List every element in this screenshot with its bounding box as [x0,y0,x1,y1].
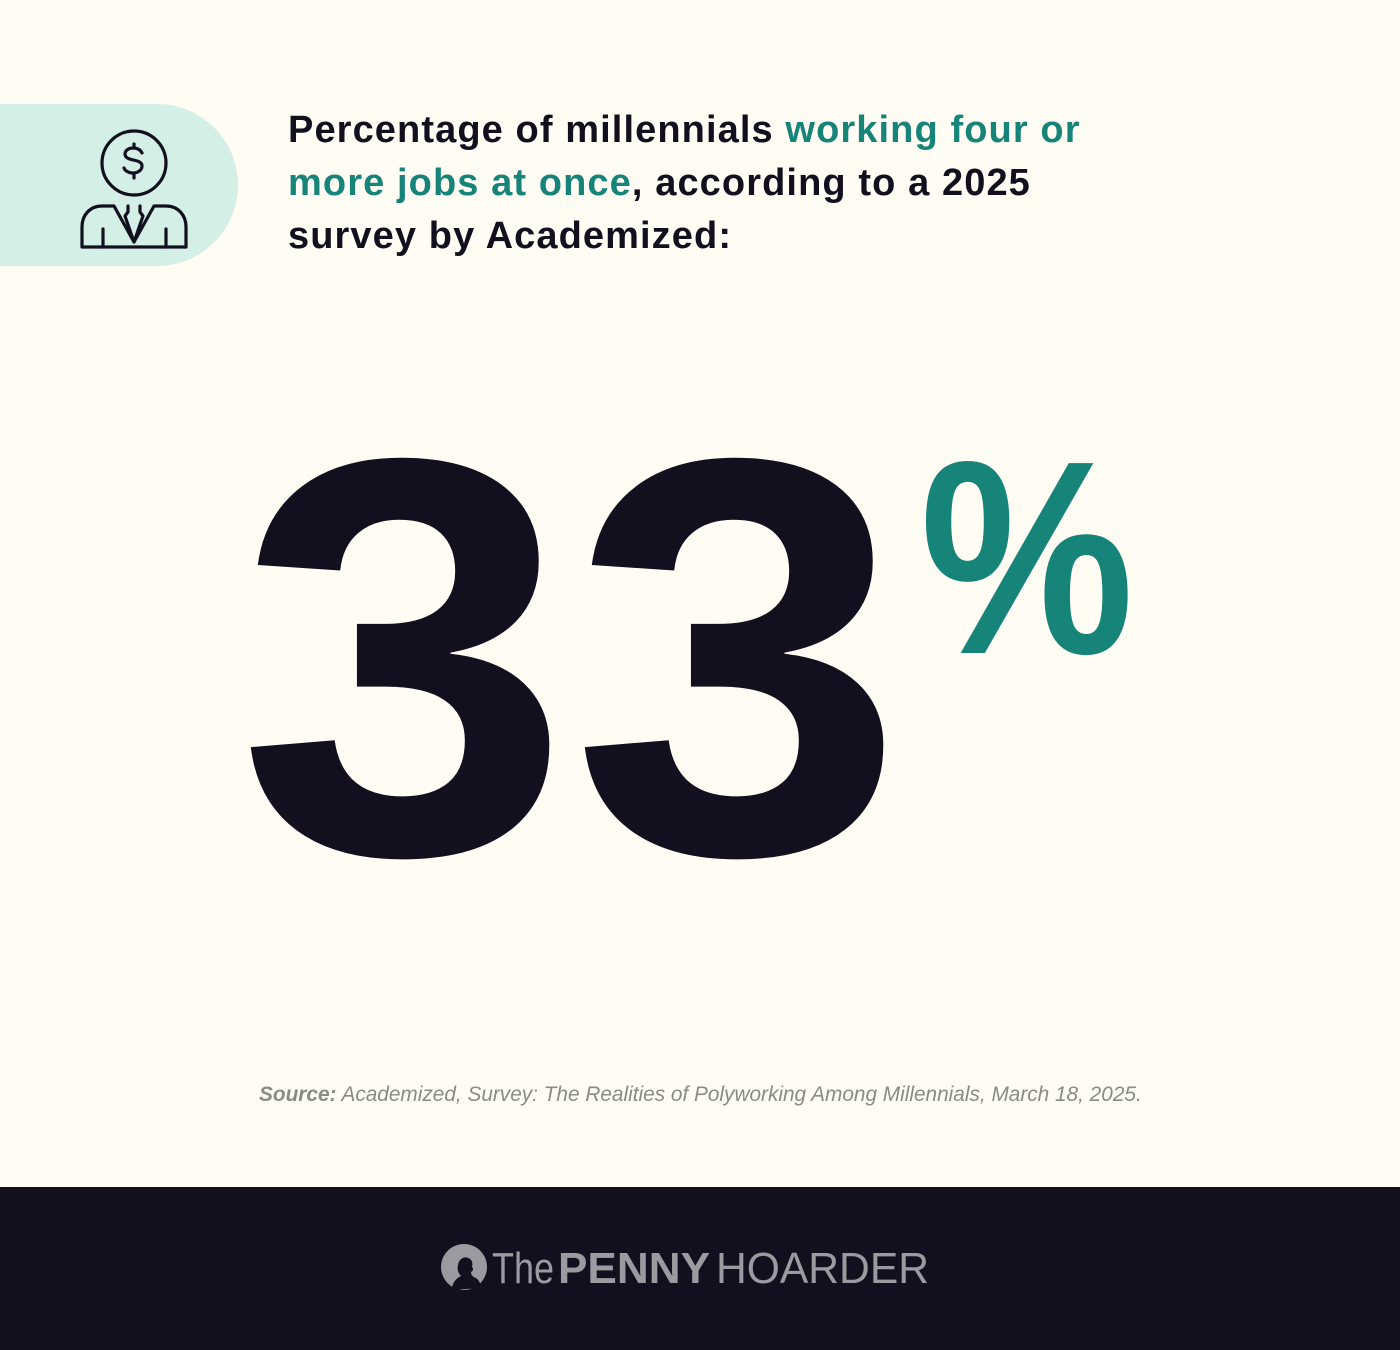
icon panel: pill background [0,104,238,266]
title [288,109,1081,257]
icon: businessman with dollar head [80,129,188,249]
logo: The Penny Hoarder: PENNY [558,1244,710,1293]
logo: The Penny Hoarder [441,1244,929,1293]
source note: Source: Academized, Survey: The Realities of Polyworking Among Millennials, March 18, 2025. [259,1083,1142,1106]
footer with logo [0,1187,1400,1350]
logo: The Penny Hoarder: HOARDER [716,1244,929,1293]
big stat: 33%: % [920,404,1134,712]
title: more jobs at once, according to a 2025 [288,162,1031,204]
big stat: 33%: 33 [237,341,905,973]
title: Percentage of millennials working four or [288,109,1081,151]
logo: The Penny Hoarder: The [492,1244,554,1293]
title: survey by Academized: [288,215,732,257]
